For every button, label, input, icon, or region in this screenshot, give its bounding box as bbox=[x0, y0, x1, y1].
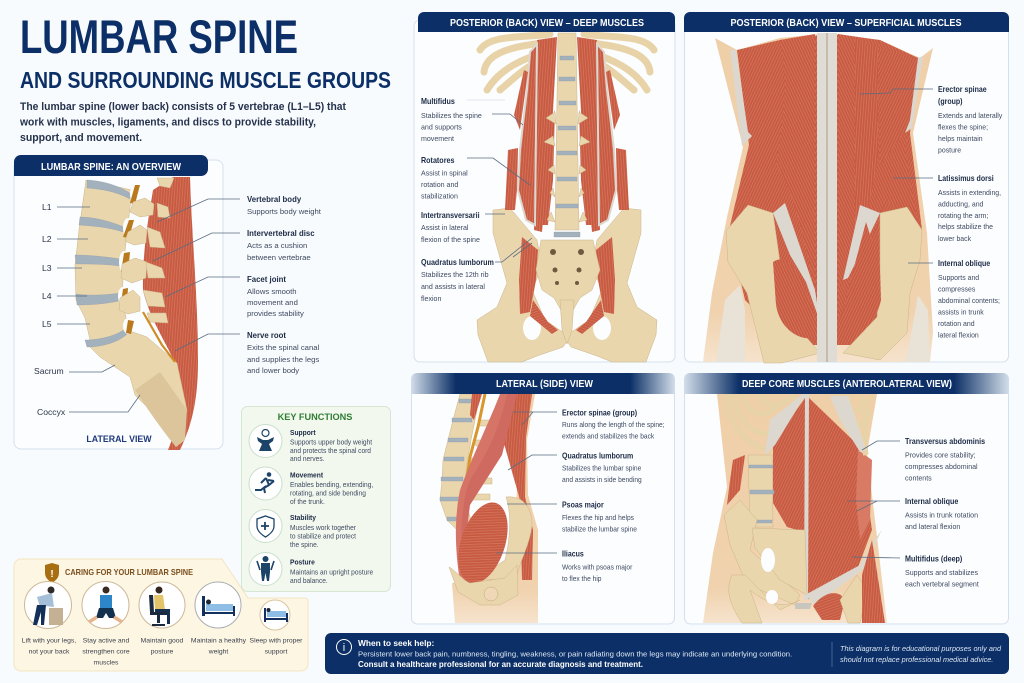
intro text: support, and movement. bbox=[20, 132, 142, 144]
labels: Provides core stability; bbox=[905, 450, 976, 460]
function text bbox=[290, 430, 373, 585]
illustration: lateral muscles bbox=[440, 394, 538, 623]
intro text: work with muscles, ligaments, and discs to provide stability, bbox=[19, 116, 316, 128]
icon: warning shield bbox=[45, 563, 59, 583]
illustration: lateral spine bbox=[75, 177, 198, 450]
labels: abdominal contents; bbox=[938, 296, 1000, 305]
callout: when to seek help: When to seek help: bbox=[358, 638, 434, 648]
leader lines and labels: vertebrae: L5 bbox=[42, 319, 52, 329]
labels: overview callouts: Nerve root bbox=[247, 331, 286, 340]
view label: LATERAL VIEW bbox=[86, 434, 152, 444]
labels: adducting, and bbox=[938, 199, 983, 209]
caring captions: weight bbox=[208, 648, 228, 656]
icon: posture bbox=[249, 552, 282, 586]
labels: Intertransversarii bbox=[421, 211, 480, 220]
callout: when to seek help: This diagram is for educational purposes only and bbox=[840, 644, 1002, 653]
function text: to stabilize and protect bbox=[290, 533, 356, 541]
labels: overview callouts: Facet joint bbox=[247, 275, 286, 284]
labels: contents bbox=[905, 473, 932, 483]
icon: info: i bbox=[343, 642, 345, 654]
labels bbox=[860, 85, 1003, 340]
icon: support bbox=[249, 424, 282, 458]
callout: when to seek help: Consult a healthcare professional for an accurate diagnosis and treatment. bbox=[358, 660, 643, 669]
labels: and supports bbox=[421, 122, 462, 132]
labels: Multifidus bbox=[421, 97, 455, 106]
ribs bbox=[480, 34, 654, 90]
function text: Posture bbox=[290, 559, 315, 567]
callout: when to seek help: Persistent lower back pain, numbness, tingling, weakness, or pain radiating down the legs may indicate an underlying condition. bbox=[358, 650, 792, 658]
heading: DEEP CORE MUSCLES (ANTEROLATERAL VIEW) bbox=[742, 379, 952, 390]
labels: overview callouts: between vertebrae bbox=[247, 253, 311, 262]
labels: Stabilizes the 12th rib bbox=[421, 270, 489, 279]
heading: KEY FUNCTIONS bbox=[278, 412, 352, 422]
labels: overview callouts: Vertebral body bbox=[247, 195, 302, 204]
panel: caring for your lumbar spine bbox=[14, 559, 308, 671]
illustration: deep muscles bbox=[477, 33, 657, 362]
labels: Quadratus lumborum bbox=[562, 451, 634, 461]
caring captions: Stay active and bbox=[83, 638, 129, 644]
labels: compresses abdominal bbox=[905, 462, 978, 471]
icon: lift with legs bbox=[24, 582, 72, 628]
labels: flexion bbox=[421, 294, 441, 303]
labels: Assist in spinal bbox=[421, 168, 468, 178]
labels: Multifidus (deep) bbox=[905, 554, 963, 564]
labels: rotation and bbox=[938, 319, 975, 328]
labels bbox=[421, 97, 532, 303]
labels: Stabilizes the lumbar spine bbox=[562, 465, 641, 473]
labels: rotating the arm; bbox=[938, 211, 988, 220]
caring captions: not your back bbox=[29, 648, 70, 656]
heading bbox=[411, 373, 675, 394]
icon: healthy weight bbox=[195, 582, 241, 628]
labels: and assists in side bending bbox=[562, 477, 642, 484]
icon: warning shield: ! bbox=[50, 569, 54, 580]
labels: Assists in extending, bbox=[938, 188, 1001, 197]
labels: extends and stabilizes the back bbox=[562, 433, 655, 441]
labels: overview callouts: Allows smooth bbox=[247, 287, 297, 296]
caring captions: Maintain good bbox=[141, 638, 184, 644]
labels: stabilize the lumbar spine bbox=[562, 526, 637, 534]
leader lines and labels: vertebrae: Coccyx bbox=[37, 407, 66, 417]
spine bbox=[555, 33, 579, 230]
function text: of the trunk. bbox=[290, 499, 325, 506]
labels: Supports and bbox=[938, 273, 979, 282]
leader lines and labels: vertebrae: L4 bbox=[42, 291, 52, 301]
icon: stability bbox=[249, 510, 282, 542]
labels: flexes the spine; bbox=[938, 122, 988, 132]
labels: Iliacus bbox=[562, 549, 584, 559]
function text: Support bbox=[290, 430, 316, 437]
labels: Supports and stabilizes bbox=[905, 568, 978, 577]
heading: CARING FOR YOUR LUMBAR SPINE bbox=[65, 567, 193, 577]
leader lines and labels: vertebrae bbox=[34, 202, 140, 417]
function text: Enables bending, extending, bbox=[290, 482, 373, 489]
labels: overview callouts: Acts as a cushion bbox=[247, 241, 307, 250]
labels: Stabilizes the spine bbox=[421, 111, 482, 120]
labels: overview callouts: Exits the spinal canal bbox=[247, 343, 320, 352]
caring captions: support bbox=[265, 648, 287, 656]
sacrum bbox=[536, 240, 600, 312]
function text: and balance. bbox=[290, 578, 328, 585]
heading: POSTERIOR (BACK) VIEW – DEEP MUSCLES bbox=[450, 18, 644, 29]
labels bbox=[847, 437, 985, 589]
panel: deep core muscles bbox=[684, 373, 1009, 624]
labels: Assists in trunk rotation bbox=[905, 510, 978, 520]
title: AND SURROUNDING MUSCLE GROUPS bbox=[20, 67, 391, 93]
title bbox=[20, 10, 391, 93]
labels: each vertebral segment bbox=[905, 579, 979, 589]
function text: the spine. bbox=[290, 542, 319, 549]
illustration: superficial muscles bbox=[703, 33, 933, 363]
icon: stay active bbox=[82, 582, 129, 628]
labels: compresses bbox=[938, 284, 976, 294]
labels: and assists in lateral bbox=[421, 282, 485, 291]
heading bbox=[684, 373, 1009, 394]
leader lines and labels: vertebrae: L3 bbox=[42, 263, 52, 273]
caring captions: Maintain a healthy bbox=[191, 638, 247, 644]
panel: posterior deep muscles bbox=[414, 12, 675, 362]
labels: Erector spinae bbox=[938, 85, 987, 94]
labels: and lateral flexion bbox=[905, 522, 960, 531]
labels: helps stabilize the bbox=[938, 222, 993, 231]
leader lines and labels: vertebrae: L2 bbox=[42, 234, 52, 244]
labels: overview callouts: provides stability bbox=[247, 309, 304, 318]
labels: Internal oblique bbox=[938, 259, 990, 268]
labels: overview callouts: and lower body bbox=[247, 366, 299, 375]
labels: Flexes the hip and helps bbox=[562, 515, 634, 522]
panel: lumbar spine overview bbox=[14, 155, 223, 450]
title: LUMBAR SPINE bbox=[20, 10, 298, 63]
labels: overview callouts: movement and bbox=[247, 298, 298, 307]
function text: Supports upper body weight bbox=[290, 439, 372, 447]
intro text bbox=[19, 101, 346, 144]
heading: overview bbox=[14, 155, 208, 176]
panel: key functions bbox=[242, 406, 390, 592]
labels: to flex the hip bbox=[562, 576, 602, 583]
labels: Rotatores bbox=[421, 156, 454, 165]
function text: Muscles work together bbox=[290, 525, 357, 532]
heading: overview: LUMBAR SPINE: AN OVERVIEW bbox=[41, 162, 181, 173]
labels: stabilization bbox=[421, 191, 458, 201]
illustration: core muscles bbox=[703, 394, 887, 623]
function text: and nerves. bbox=[290, 456, 325, 463]
labels: Quadratus lumborum bbox=[421, 258, 494, 267]
heading bbox=[684, 12, 1009, 32]
heading bbox=[418, 12, 675, 32]
function text: rotating, and side bending bbox=[290, 490, 366, 498]
labels: Transversus abdominis bbox=[905, 437, 985, 446]
labels: movement bbox=[421, 134, 454, 143]
labels: Internal oblique bbox=[905, 497, 958, 506]
labels: overview callouts: Supports body weight bbox=[247, 207, 322, 216]
labels: helps maintain bbox=[938, 134, 983, 143]
labels: overview callouts: and supplies the legs bbox=[247, 355, 319, 364]
callout: when to seek help bbox=[325, 633, 1009, 674]
heading: POSTERIOR (BACK) VIEW – SUPERFICIAL MUSCLES bbox=[730, 18, 962, 29]
function text: and protects the spinal cord bbox=[290, 448, 371, 455]
labels: rotation and bbox=[421, 180, 458, 189]
function text: Maintains an upright posture bbox=[290, 569, 373, 577]
labels: Assist in lateral bbox=[421, 223, 469, 232]
panel: posterior superficial muscles bbox=[684, 12, 1009, 363]
muscles left and mirrored right bbox=[477, 37, 570, 362]
labels: lateral flexion bbox=[938, 330, 979, 340]
labels bbox=[496, 408, 665, 583]
labels: flexion of the spine bbox=[421, 235, 480, 244]
caring captions: Sleep with proper bbox=[250, 638, 303, 644]
icon: info bbox=[336, 640, 352, 654]
intro text: The lumbar spine (lower back) consists of 5 vertebrae (L1–L5) that bbox=[20, 101, 346, 113]
labels: overview callouts: Intervertebral disc bbox=[247, 229, 315, 238]
heading: LATERAL (SIDE) VIEW bbox=[496, 379, 593, 390]
function text: Movement bbox=[290, 472, 324, 480]
labels: posture bbox=[938, 145, 961, 155]
caring captions bbox=[22, 638, 303, 666]
caring captions: strengthen core bbox=[82, 648, 130, 656]
icon: good posture bbox=[139, 582, 185, 628]
labels: Runs along the length of the spine; bbox=[562, 422, 665, 429]
caring captions: Lift with your legs, bbox=[22, 638, 76, 644]
caring captions: muscles bbox=[94, 660, 119, 666]
leader lines and labels: vertebrae: L1 bbox=[42, 202, 52, 212]
icon: sleep support bbox=[260, 600, 290, 630]
labels: Extends and laterally bbox=[938, 111, 1003, 120]
labels: assists in trunk bbox=[938, 307, 984, 317]
function text: Stability bbox=[290, 515, 316, 522]
labels: lower back bbox=[938, 234, 971, 243]
icon: movement bbox=[249, 467, 282, 500]
labels: Works with psoas major bbox=[562, 564, 633, 572]
labels: overview callouts bbox=[153, 195, 322, 375]
labels: (group) bbox=[938, 97, 963, 106]
caring captions: posture bbox=[151, 648, 174, 656]
labels: Erector spinae (group) bbox=[562, 408, 638, 418]
callout: when to seek help: should not replace professional medical advice. bbox=[840, 655, 993, 664]
labels: Latissimus dorsi bbox=[938, 174, 994, 183]
labels: Psoas major bbox=[562, 500, 604, 510]
panel: lateral side view bbox=[411, 373, 675, 624]
leader lines and labels: vertebrae: Sacrum bbox=[34, 366, 64, 376]
